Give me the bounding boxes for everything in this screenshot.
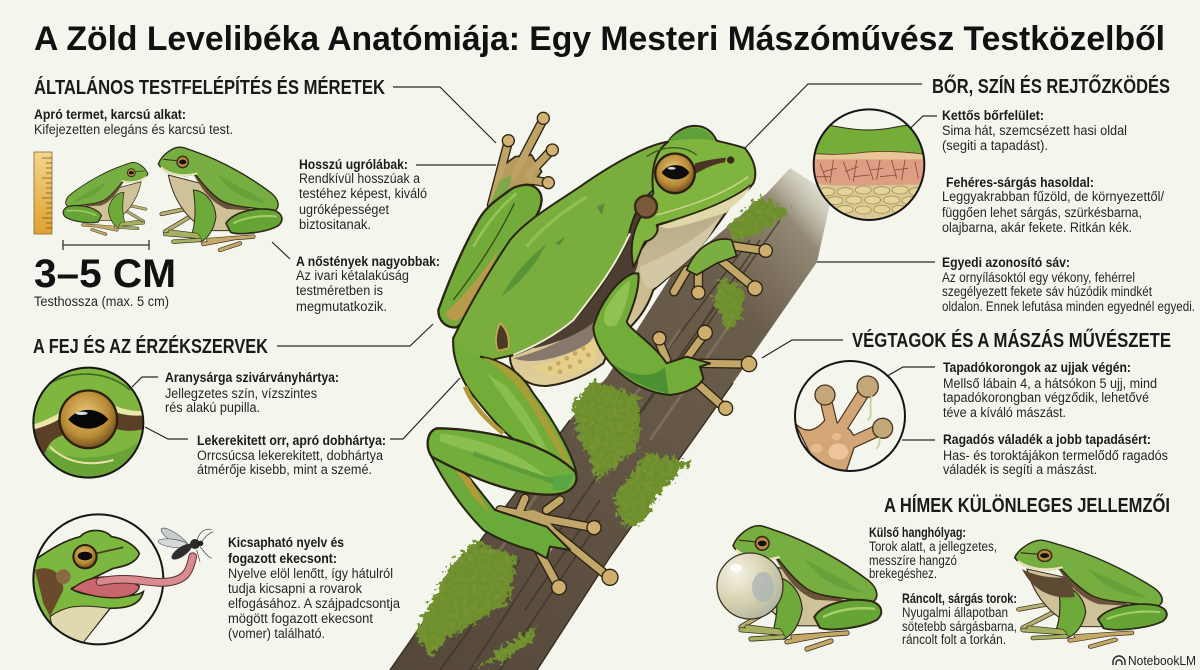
text: tongue and vomer: elfogásához. A szájpadcsontja: [228, 596, 400, 611]
text: unique stripe: szegélyezett fekete sáv húzódik mindkét: [942, 284, 1152, 299]
text: long legs: [299, 156, 427, 232]
text: long legs: ugróképességet: [299, 202, 389, 217]
text: vocal sac: [869, 524, 997, 581]
text: wrinkled throat: ráncolt folt a torkán.: [902, 632, 1006, 647]
text: double skin: [942, 107, 1127, 153]
rear upper hand: [487, 112, 558, 208]
shank: [428, 428, 577, 495]
large frog: [158, 147, 282, 250]
text: belly colour: olajbarna, akár fekete. Ritkán kék.: [942, 220, 1132, 235]
size caption: Testhossza (max. 5 cm): [34, 294, 169, 309]
rear arm: [438, 185, 542, 327]
title: A Zöld Levelibéka Anatómiája: Egy Mesteri Mászóművész Testközelből: [34, 20, 1165, 58]
eye detail circle: [30, 363, 147, 480]
text: golden iris: [165, 369, 339, 415]
text: unique stripe: [942, 254, 1195, 314]
text: unique stripe: Az ornyílásoktól egy vékony, fehérrel: [942, 270, 1135, 285]
front arm: [593, 273, 757, 415]
text: tongue and vomer: fogazott ekecsont:: [228, 550, 337, 566]
heading: head and senses: A FEJ ÉS AZ ÉRZÉKSZERVEK: [33, 335, 268, 358]
hind leg: [428, 337, 618, 595]
resting male frog with dark throat: [1015, 540, 1167, 647]
text: females larger: Az ivari kétalakúság: [296, 268, 409, 283]
dimension bar: [63, 240, 149, 250]
text: wrinkled throat: sötetebb sárgásbarna,: [902, 619, 1017, 634]
small frog: [63, 162, 148, 234]
eye: [654, 152, 696, 194]
icon: mosquito: [158, 525, 213, 562]
text: belly colour: Leggyakrabban fűzöld, de környezettől/: [942, 189, 1164, 204]
icon: ruler: [34, 152, 52, 234]
text: long legs: Rendkívül hosszúak a: [299, 171, 420, 186]
text: sticky secretion: váladék is segíti a mászást.: [943, 462, 1097, 477]
skin cross-section circle: [810, 107, 930, 223]
text: tongue and vomer: [228, 534, 400, 641]
text: vocal sac: messzíre hangzó: [869, 553, 957, 568]
branch: [390, 168, 832, 670]
text: tongue and vomer: mögött fogazott ekecsont: [228, 611, 373, 626]
toe pad circle: [793, 360, 907, 473]
text: unique stripe: Egyedi azonosító sáv:: [942, 254, 1070, 270]
text: tongue and vomer: (vomer) található.: [228, 626, 325, 641]
text: small build: Apró termet, karcsú alkat:: [34, 106, 186, 122]
text: tongue and vomer: Nyelve elöl lenőtt, így hátulról: [228, 566, 393, 581]
text: females larger: megmutatkozik.: [296, 299, 387, 314]
text: rounded snout: Orrcsúcsa lekerekitett, dobhártya: [197, 448, 383, 463]
tongue detail circle: [30, 513, 213, 650]
text: belly colour: függően lehet sárgás, szürkésbarna,: [942, 205, 1142, 220]
text: toe pads: [943, 359, 1157, 420]
text: toe pads: tapadókorongban végződik, lehetővé: [943, 390, 1149, 405]
heading: general body: ÁLTALÁNOS TESTFELÉPÍTÉS ÉS MÉRETEK: [34, 76, 385, 99]
text: sticky secretion: Ragadós váladék a jobb tapadásért:: [943, 431, 1151, 447]
text: double skin: (segiti a tapadást).: [942, 138, 1048, 153]
text: long legs: biztositanak.: [299, 217, 371, 232]
right hand behind throat: [674, 239, 772, 299]
toes: [500, 498, 608, 587]
text: vocal sac: Torok alatt, a jellegzetes,: [869, 539, 997, 554]
text: toe pads: téve a kíváló mászást.: [943, 405, 1066, 420]
eye stripe and eardrum: [695, 158, 726, 174]
text: rounded snout: [197, 432, 386, 477]
text: wrinkled throat: Ráncolt, sárgás torok:: [902, 590, 1017, 606]
text: rounded snout: átmérője kisebb, mint a szemé.: [197, 462, 372, 477]
text: golden iris: Aranysárga szivárványhártya:: [165, 369, 339, 385]
text: toe pads: Tapadókorongok az ujjak végén:: [943, 359, 1131, 375]
text: vocal sac: Külső hanghólyag:: [869, 524, 966, 540]
text: golden iris: rés alakú pupilla.: [165, 400, 260, 415]
text: wrinkled throat: Nyugalmi állapotban: [902, 605, 1008, 620]
text: vocal sac: brekegéshez.: [869, 566, 937, 581]
text: double skin: Sima hát, szemcsézett hasi oldal: [942, 123, 1127, 138]
text: small build: [34, 106, 233, 137]
leader lines: [132, 84, 937, 440]
text: belly colour: [942, 174, 1164, 235]
text: long legs: testéhez képest, kiváló: [299, 186, 427, 201]
text: sticky secretion: Has- és toroktájákon termelődő ragadós: [943, 448, 1168, 463]
text: tongue and vomer: tudja kicsapni a rovarok: [228, 581, 362, 596]
text: long legs: Hosszú ugrólábak:: [299, 156, 408, 172]
text: belly colour: Fehéres-sárgás hasoldal:: [946, 174, 1094, 190]
text: toe pads: Mellső lábain 4, a hátsókon 5 ujj, mind: [943, 376, 1157, 391]
text: tongue and vomer: Kicsapható nyelv és: [228, 534, 344, 550]
dorsal green: [453, 142, 668, 373]
tarsus: [431, 455, 570, 558]
moss patches: [415, 197, 790, 667]
text: sticky secretion: [943, 431, 1168, 477]
dark side band: [533, 192, 657, 348]
text: wrinkled throat: [902, 590, 1017, 647]
text: females larger: testméretben is: [296, 283, 383, 298]
text: small build: Kifejezetten elegáns és karcsú test.: [34, 122, 233, 137]
head: [632, 126, 755, 267]
text: rounded snout: Lekerekitett orr, apró dobhártya:: [197, 432, 386, 448]
NotebookLM logo: NotebookLM: [1128, 654, 1196, 668]
text: double skin: Kettős bőrfelület:: [942, 107, 1044, 123]
text: golden iris: Jellegzetes szín, vízszintes: [165, 386, 317, 401]
belly and throat: [510, 207, 730, 386]
size value: 3–5 CM: [34, 252, 176, 296]
text: females larger: A nőstények nagyobbak:: [296, 253, 440, 269]
main frog: [428, 112, 772, 595]
text: females larger: [296, 253, 440, 314]
calling male frog with vocal sac: [717, 526, 881, 649]
